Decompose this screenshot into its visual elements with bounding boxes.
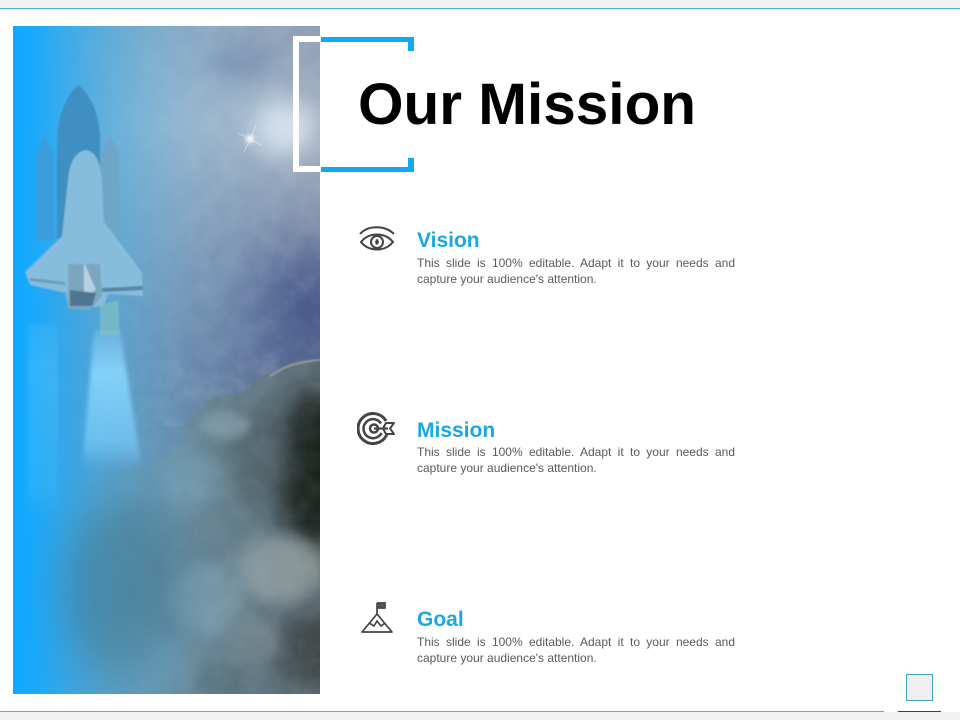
panel: space shuttle photo	[13, 26, 320, 694]
bracket: blue top and bottom frame	[321, 37, 414, 172]
bottom bar	[0, 712, 960, 720]
icon: eye	[359, 226, 395, 250]
exhaust flames	[27, 326, 140, 498]
icon: mountain flag	[361, 602, 393, 633]
icon: space shuttle	[25, 85, 143, 335]
text: mission: This slide is 100% editable. Adapt it to your needs and capture your audience's attention.	[417, 445, 735, 475]
icon: target	[357, 412, 395, 446]
heading: vision: Vision	[417, 229, 480, 252]
clouds	[128, 358, 320, 694]
title: Our Mission	[358, 72, 696, 137]
heading: goal: Goal	[417, 608, 464, 631]
top bar	[0, 0, 960, 9]
bottom white gap	[884, 708, 944, 712]
heading: mission: Mission	[417, 419, 495, 442]
text: vision: This slide is 100% editable. Adapt it to your needs and capture your audience's attention.	[417, 256, 735, 286]
lower cloud shade	[63, 500, 187, 680]
text: goal: This slide is 100% editable. Adapt it to your needs and capture your audience's attention.	[417, 635, 735, 665]
bottom blue line	[0, 711, 884, 712]
bottom dark line	[898, 711, 941, 712]
small square button	[906, 674, 933, 701]
lens flare star	[238, 126, 262, 152]
bracket: white left frame	[293, 36, 320, 172]
